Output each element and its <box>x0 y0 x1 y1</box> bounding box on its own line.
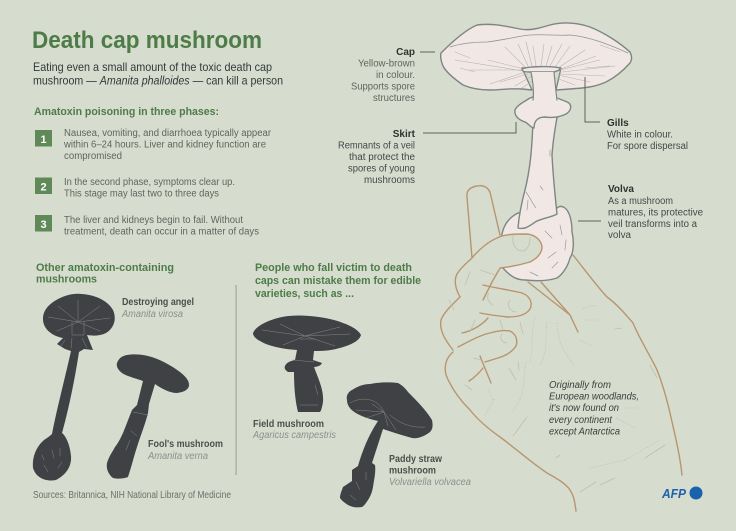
intro text: mushroom — Amanita phalloides — can kill a person <box>33 74 283 88</box>
phase 2: 2 <box>40 182 47 194</box>
phase 2: In the second phase, symptoms clear up. <box>64 177 235 188</box>
text: paddy straw mushroom <box>389 454 471 488</box>
cap <box>441 23 632 90</box>
label: gills <box>585 77 688 152</box>
phase 3 <box>35 215 259 238</box>
label: skirt: spores of young <box>348 164 415 174</box>
gills <box>455 42 620 88</box>
intro text <box>33 60 283 88</box>
phase 1: 1 <box>40 134 47 146</box>
label: cap: in colour. <box>376 70 415 81</box>
label: gills: Gills <box>607 118 629 129</box>
fingers <box>480 285 531 317</box>
text: fool's mushroom <box>147 439 223 462</box>
label: volva: veil transforms into a <box>608 219 697 230</box>
phase 2: This stage may last two to three days <box>64 188 219 200</box>
note: origin: every continent <box>549 415 613 426</box>
volva <box>502 206 573 281</box>
hand outline <box>445 352 576 511</box>
label: volva: volva <box>608 230 631 241</box>
stem collar <box>522 67 560 72</box>
text: field mushroom: Agaricus campestris <box>252 430 336 441</box>
phase 1 <box>35 128 272 162</box>
note: origin: except Antarctica <box>549 426 620 438</box>
text: field mushroom <box>252 419 336 441</box>
text: paddy straw mushroom: Paddy straw <box>389 454 442 465</box>
stem <box>518 112 558 228</box>
heading: other amatoxin mushrooms: mushrooms <box>36 274 97 286</box>
label: cap: Supports spore <box>351 82 415 92</box>
label: cap: Yellow-brown <box>358 58 415 70</box>
phase 1: within 6–24 hours. Liver and kidney function are <box>63 140 266 150</box>
AFP logo <box>661 486 702 501</box>
icon: paddy straw mushroom <box>340 382 433 507</box>
heading: edible lookalikes <box>255 262 421 300</box>
stem and volva marks <box>526 150 566 276</box>
note: origin: European woodlands, <box>549 392 639 402</box>
text: fool's mushroom: Fool's mushroom <box>148 439 223 450</box>
heading: other amatoxin mushrooms <box>36 262 174 286</box>
text: paddy straw mushroom: Volvariella volvacea <box>389 477 471 488</box>
label: cap <box>351 47 435 104</box>
text: destroying angel: Amanita virosa <box>121 309 183 320</box>
phase 3: treatment, death can occur in a matter of days <box>64 226 259 238</box>
sources: Sources: Britannica, NIH National Library of Medicine <box>33 490 231 501</box>
icon: fool's mushroom <box>107 354 189 479</box>
label: volva: matures, its protective <box>608 208 703 218</box>
note: origin: Originally from <box>549 380 611 391</box>
note: origin <box>549 380 639 438</box>
label: volva <box>578 184 703 241</box>
illustration: hand back <box>467 186 682 475</box>
illustration: hand front <box>441 234 665 511</box>
skirt <box>515 96 571 128</box>
phase 2 <box>35 177 235 200</box>
heading: edible lookalikes: People who fall victim to death <box>255 262 412 274</box>
heading: other amatoxin mushrooms: Other amatoxin-containing <box>36 262 174 274</box>
label: skirt: Skirt <box>393 129 416 140</box>
label: skirt: Remnants of a veil <box>338 140 415 152</box>
note: origin: it's now found on <box>549 403 619 414</box>
AFP logo: AFP <box>661 486 686 501</box>
phase 1: Nausea, vomiting, and diarrhoea typically appear <box>64 128 272 139</box>
text: fool's mushroom: Amanita verna <box>147 451 208 462</box>
label: volva: As a mushroom <box>608 196 673 207</box>
text: field mushroom: Field mushroom <box>253 419 324 430</box>
phase 1: compromised <box>64 151 122 162</box>
label: gills: For spore dispersal <box>607 141 688 152</box>
phase 3: The liver and kidneys begin to fail. Without <box>64 215 243 226</box>
underside edge <box>450 35 628 53</box>
label: skirt: mushrooms <box>364 175 415 186</box>
label: cap: Cap <box>396 47 415 58</box>
heading: edible lookalikes: caps can mistake them for edible <box>255 275 421 287</box>
label: skirt <box>338 122 516 186</box>
phase 3: 3 <box>40 219 47 231</box>
label: gills: White in colour. <box>607 130 673 140</box>
text: paddy straw mushroom: mushroom <box>389 466 436 476</box>
label: skirt: that protect the <box>349 152 415 163</box>
icon: field mushroom <box>253 316 361 412</box>
label: cap: structures <box>373 93 415 104</box>
heading: three phases: Amatoxin poisoning in three phases: <box>34 106 219 118</box>
text: destroying angel <box>121 297 194 320</box>
heading: edible lookalikes: varieties, such as ... <box>255 288 354 300</box>
creases <box>449 270 665 492</box>
label: volva: Volva <box>608 184 634 195</box>
illustration: death cap mushroom <box>441 23 632 281</box>
intro text: Eating even a small amount of the toxic death cap <box>33 60 272 74</box>
text: destroying angel: Destroying angel <box>122 297 194 308</box>
title: Death cap mushroom <box>32 27 262 54</box>
icon: destroying angel mushroom <box>33 294 115 480</box>
thumb <box>455 234 542 297</box>
